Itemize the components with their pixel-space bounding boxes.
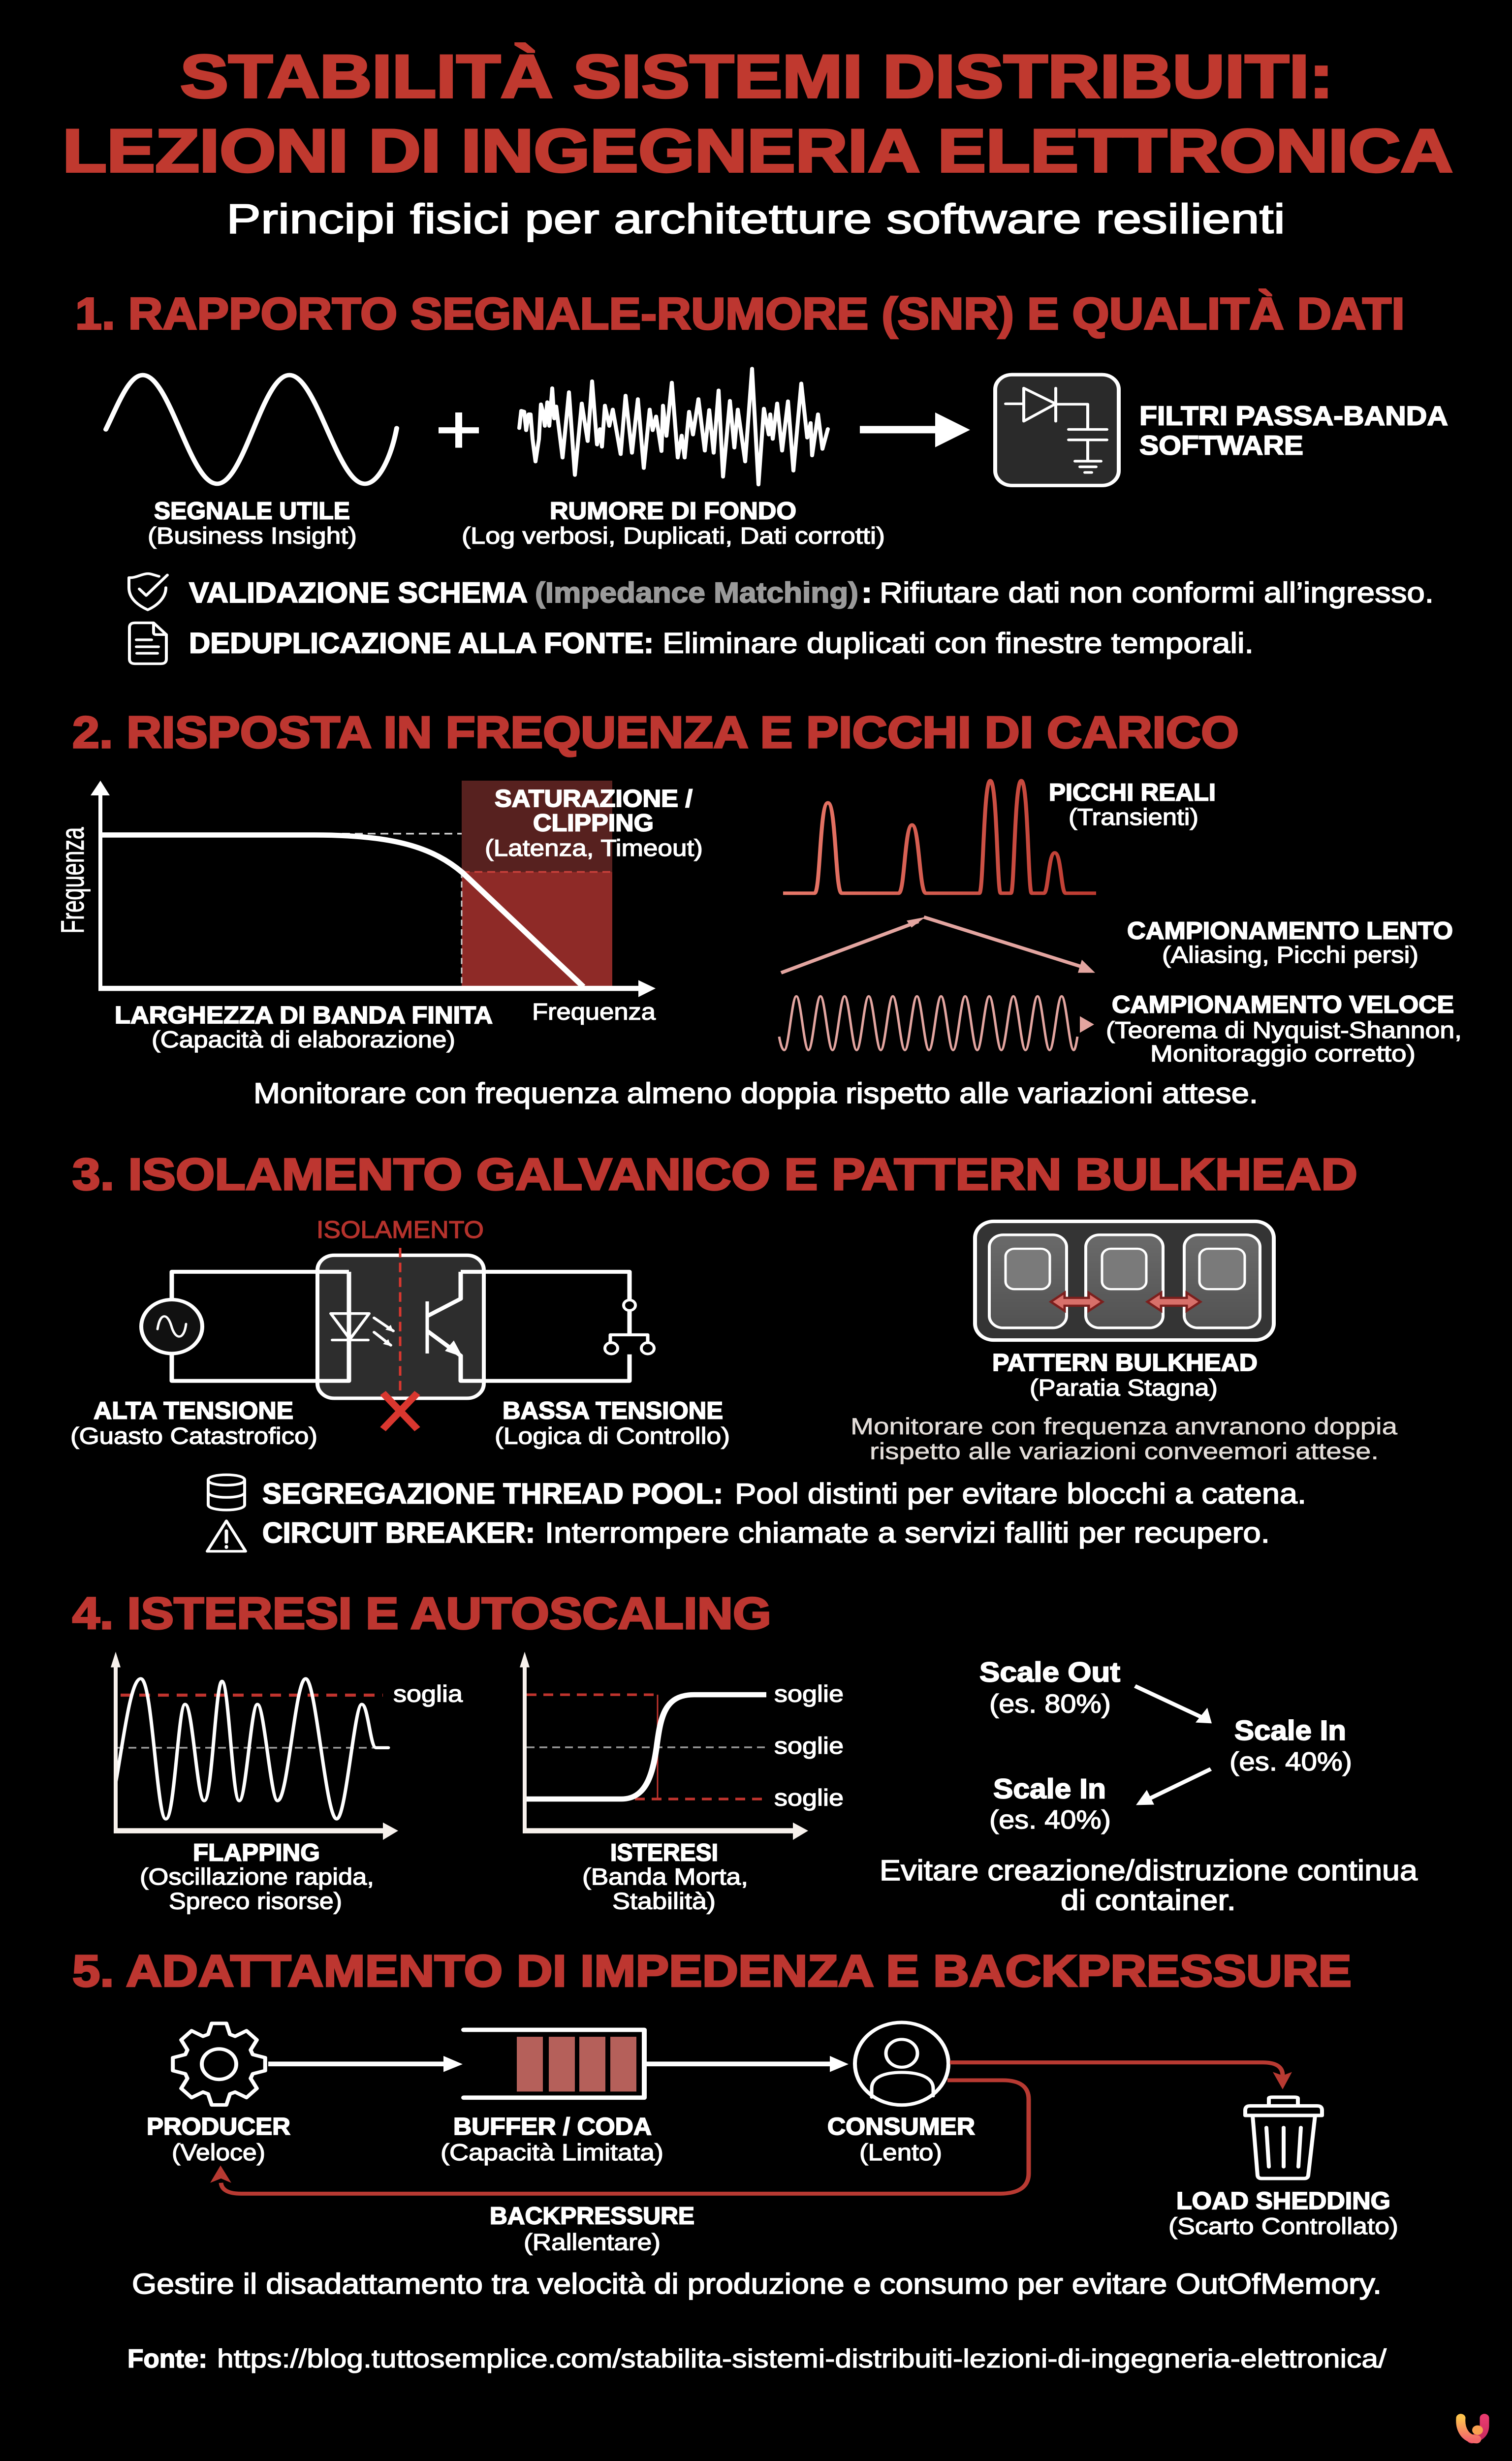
label: soglia: soglia (393, 1680, 463, 1707)
icon: consumer (855, 2022, 948, 2105)
axis label: frequenza vertical: Frequenza (55, 827, 91, 934)
noise signal (519, 369, 828, 485)
scale in node left: Scale In (993, 1773, 1106, 1804)
arrow: load shedding (950, 2062, 1292, 2089)
arrow to filter (860, 412, 970, 447)
note: bulkhead (850, 1413, 1398, 1464)
section 4: hysteresis (72, 1588, 1418, 1916)
scale out node: (es. 80%) (989, 1689, 1111, 1718)
label: load shedding: LOAD SHEDDING (1176, 2187, 1390, 2214)
scale in node right: Scale In (1234, 1714, 1346, 1746)
heading 2: 2. RISPOSTA IN FREQUENZA E PICCHI DI CARICO (72, 707, 1239, 757)
buffer queue (464, 2030, 644, 2098)
heading 3: 3. ISOLAMENTO GALVANICO E PATTERN BULKHEAD (72, 1149, 1357, 1199)
icon: filter circuit (995, 375, 1119, 485)
label: backpressure: (Rallentare) (524, 2229, 661, 2255)
note: mismatch: Gestire il disadattamento tra velocità di produzione e consumo per evitare OutOfMemory. (132, 2269, 1382, 2300)
label: flapping: Spreco risorse) (169, 1888, 342, 1914)
label: alta tensione: (Guasto Catastrofico) (70, 1423, 317, 1449)
labels: soglie: soglie (774, 1733, 844, 1759)
note: containers: Evitare creazione/distruzione continua (880, 1855, 1418, 1887)
arrow: in to in (1136, 1769, 1211, 1805)
arrow: buffer to consumer (646, 2056, 849, 2072)
AC source (141, 1299, 202, 1354)
label: saturazione: (Latenza, Timeout) (485, 835, 703, 861)
label: campionamento lento (1127, 917, 1453, 968)
note: monitoring: Monitorare con frequenza almeno doppia rispetto alle variazioni attese. (253, 1078, 1258, 1109)
real peaks waveform (783, 781, 1096, 893)
label: saturazione: SATURAZIONE / (495, 785, 693, 812)
label: producer: (Veloce) (172, 2139, 265, 2165)
icon: gear producer (173, 2023, 265, 2105)
label: producer: PRODUCER (147, 2113, 290, 2140)
label: campionamento lento: CAMPIONAMENTO LENTO (1127, 917, 1453, 945)
axis label: frequenza: Frequenza (532, 999, 656, 1025)
slow sampling arrows (781, 917, 1095, 973)
label: pattern bulkhead: PATTERN BULKHEAD (992, 1349, 1258, 1376)
source line: https://blog.tuttosemplice.com/stabilita-sistemi-distribuiti-lezioni-di-ingegneria-elettronica/ (217, 2344, 1386, 2373)
note: bulkhead: rispetto alle variazioni conveemori attese. (870, 1438, 1379, 1464)
label: backpressure: BACKPRESSURE (490, 2203, 694, 2230)
label: flapping (140, 1839, 374, 1914)
label: rumore di fondo (462, 497, 885, 549)
label: backpressure (490, 2203, 694, 2255)
arrow: out to in (1135, 1686, 1212, 1723)
note: bulkhead: Monitorare con frequenza anvranono doppia (850, 1413, 1398, 1439)
optocoupler circuit (141, 1248, 654, 1429)
label: consumer: CONSUMER (827, 2113, 975, 2140)
icon: shield check (129, 573, 167, 610)
label: consumer (827, 2113, 975, 2165)
plus sign (439, 412, 479, 448)
filter label: SOFTWARE (1139, 431, 1303, 461)
arrow: producer to buffer (268, 2056, 463, 2072)
bullet: circuit breaker: Interrompere chiamate a servizi falliti per recupero. (545, 1517, 1270, 1549)
red X (383, 1393, 417, 1429)
heading 4: 4. ISTERESI E AUTOSCALING (72, 1588, 771, 1639)
label: larghezza di banda (115, 1002, 493, 1053)
bullet: validazione schema (189, 577, 1434, 609)
switch (605, 1300, 654, 1354)
label: picchi reali: PICCHI REALI (1049, 779, 1216, 806)
bullet: thread pool (262, 1478, 1306, 1510)
bullet: validazione schema: : (861, 577, 872, 609)
bullet: circuit breaker: CIRCUIT BREAKER: (262, 1517, 535, 1549)
bullet: thread pool: Pool distinti per evitare blocchi a catena. (735, 1478, 1306, 1510)
label: segnale utile: (Business Insight) (148, 523, 357, 549)
label: picchi reali: (Transienti) (1069, 804, 1198, 830)
heading 5: 5. ADATTAMENTO DI IMPEDENZA E BACKPRESSURE (72, 1946, 1352, 1996)
label: isteresi: (Banda Morta, (582, 1863, 748, 1890)
filter label (1139, 401, 1448, 461)
labels: soglie (774, 1680, 844, 1811)
sine signal (106, 375, 397, 484)
saturation band (462, 781, 612, 987)
title: STABILITÀ SISTEMI DISTRIBUITI: (180, 42, 1333, 110)
label: isteresi (582, 1839, 748, 1914)
bullet: deduplicazione: Eliminare duplicati con finestre temporali. (662, 628, 1254, 659)
scale in node right (1229, 1714, 1352, 1776)
label: buffer: (Capacità Limitata) (441, 2139, 663, 2165)
title: LEZIONI DI INGEGNERIA ELETTRONICA (63, 116, 1453, 185)
subtitle: Principi fisici per architetture software resilienti (226, 196, 1285, 242)
label: isteresi: Stabilità) (612, 1888, 716, 1914)
label: flapping: FLAPPING (193, 1839, 320, 1866)
label: saturazione: CLIPPING (533, 809, 654, 837)
section 3: galvanic isolation (70, 1149, 1398, 1551)
title (63, 42, 1453, 185)
section 5: backpressure (72, 1946, 1398, 2300)
label: saturazione (485, 785, 703, 861)
arrow: backpressure (210, 2080, 1029, 2194)
isolation barrier (399, 1248, 402, 1392)
labels: soglie: soglie (774, 1784, 844, 1811)
scale in node right: (es. 40%) (1229, 1747, 1352, 1776)
logo (1461, 2418, 1484, 2439)
label: bassa tensione: (Logica di Controllo) (495, 1423, 730, 1449)
icon: warning (207, 1521, 246, 1551)
label: bassa tensione: BASSA TENSIONE (503, 1397, 723, 1424)
hysteresis chart (520, 1652, 808, 1840)
filter label: FILTRI PASSA-BANDA (1139, 401, 1448, 431)
label: rumore di fondo: (Log verbosi, Duplicati, Dati corrotti) (462, 523, 885, 549)
section 2: frequency response (55, 707, 1462, 1109)
label: pattern bulkhead (992, 1349, 1258, 1401)
label: larghezza di banda: (Capacità di elaborazione) (152, 1026, 455, 1053)
bullet: validazione schema: (Impedance Matching) (535, 577, 858, 609)
scale in node left: (es. 40%) (989, 1805, 1111, 1834)
bullet: deduplicazione: DEDUPLICAZIONE ALLA FONTE: (189, 628, 654, 659)
scale in node left (989, 1773, 1111, 1834)
scale out node: Scale Out (979, 1656, 1120, 1688)
note: containers (880, 1855, 1418, 1916)
heading 1: 1. RAPPORTO SEGNALE-RUMORE (SNR) E QUALITÀ DATI (75, 288, 1405, 339)
label: campionamento veloce: (Teorema di Nyquist-Shannon, (1106, 1017, 1462, 1043)
note: containers: di container. (1061, 1885, 1236, 1916)
label: isolamento: ISOLAMENTO (316, 1216, 484, 1243)
bullet: thread pool: SEGREGAZIONE THREAD POOL: (262, 1478, 723, 1510)
label: campionamento lento: (Aliasing, Picchi persi) (1162, 942, 1418, 968)
bullet: deduplicazione (189, 628, 1254, 659)
LED and light arrows (331, 1314, 393, 1346)
label: consumer: (Lento) (859, 2139, 942, 2165)
labels: soglie: soglie (774, 1680, 844, 1707)
icon: trash (1245, 2097, 1322, 2178)
label: campionamento veloce: CAMPIONAMENTO VELOCE (1112, 991, 1454, 1018)
label: isteresi: ISTERESI (610, 1839, 718, 1866)
section 1: SNR (75, 288, 1448, 663)
label: pattern bulkhead: (Paratia Stagna) (1030, 1375, 1218, 1401)
icon: document (129, 623, 166, 663)
label: producer (147, 2113, 290, 2165)
bullet: validazione schema: Rifiutare dati non conformi all’ingresso. (880, 577, 1434, 609)
label: flapping: (Oscillazione rapida, (140, 1863, 374, 1890)
fast sampling wave (779, 996, 1094, 1050)
bullet: validazione schema: VALIDAZIONE SCHEMA (189, 577, 528, 609)
label: alta tensione (70, 1397, 317, 1449)
label: alta tensione: ALTA TENSIONE (94, 1397, 293, 1424)
label: buffer: BUFFER / CODA (453, 2113, 652, 2140)
label: load shedding: (Scarto Controllato) (1168, 2213, 1398, 2239)
source line: Fonte: (127, 2344, 207, 2373)
label: rumore di fondo: RUMORE DI FONDO (550, 497, 796, 525)
bulkhead diagram (975, 1221, 1274, 1340)
label: bassa tensione (495, 1397, 730, 1449)
frequency chart (91, 781, 656, 997)
label: segnale utile: SEGNALE UTILE (154, 497, 350, 525)
icon: database (208, 1475, 245, 1510)
label: buffer (441, 2113, 663, 2165)
label: segnale utile (148, 497, 357, 549)
label: load shedding (1168, 2187, 1398, 2239)
label: campionamento veloce: Monitoraggio corretto) (1150, 1040, 1416, 1067)
label: picchi reali (1049, 779, 1216, 830)
label: campionamento veloce (1106, 991, 1462, 1067)
scale out node (979, 1656, 1120, 1718)
flapping chart (111, 1652, 398, 1840)
label: larghezza di banda: LARGHEZZA DI BANDA FINITA (115, 1002, 493, 1029)
phototransistor (427, 1301, 463, 1357)
